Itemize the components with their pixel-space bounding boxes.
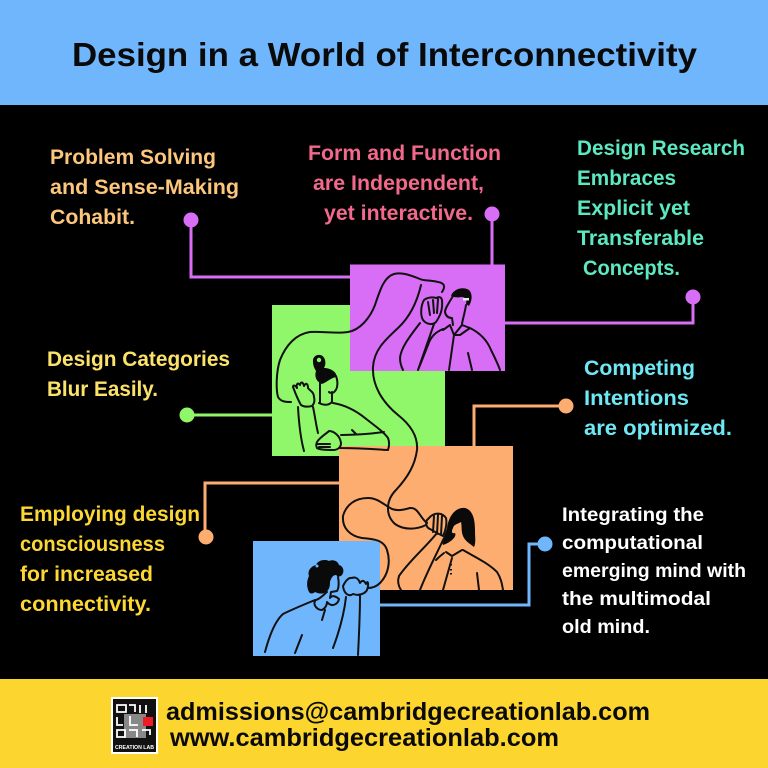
text block: form and function: are Independent, [313, 172, 484, 195]
text block: integrating minds: computational [562, 532, 703, 554]
icon: orange figure hair [442, 508, 475, 547]
panel: blue [253, 541, 380, 656]
connector: design categories to green panel [180, 408, 272, 422]
illustration: blue figure [265, 560, 368, 655]
string cords between figures [277, 273, 444, 588]
connector: design consciousness to orange panel [198, 483, 339, 544]
panel: green [272, 305, 445, 456]
icon: blue figure hair [307, 560, 343, 594]
text block: design research [577, 137, 745, 280]
text block: competing intentions [584, 357, 732, 440]
text block: competing intentions: Competing [584, 357, 695, 380]
text block: design consciousness: for increased [20, 563, 153, 586]
text block: design consciousness: consciousness [20, 533, 165, 556]
panel: orange [339, 446, 513, 590]
header band [0, 0, 768, 105]
text block: problem solving [50, 146, 239, 229]
connector: design research to purple panel [505, 290, 700, 323]
text block: integrating minds: Integrating the [562, 504, 704, 526]
text block: integrating minds: old mind. [562, 616, 650, 638]
icon: creation lab logo: CREATION LAB [115, 745, 154, 751]
text block: design research: Design Research [577, 137, 745, 160]
illustration: orange figure [398, 508, 503, 590]
connector: competing intentions to orange panel [474, 398, 574, 446]
text block: design research: Explicit yet [577, 197, 690, 220]
contact website: www.cambridgecreationlab.com [169, 724, 559, 752]
text block: competing intentions: Intentions [584, 387, 689, 410]
text block: design consciousness: Employing design [20, 503, 200, 526]
text block: competing intentions: are optimized. [584, 417, 732, 440]
panel: purple [350, 264, 505, 371]
icon: purple figure hair [451, 288, 472, 306]
illustration: green figure [293, 355, 389, 451]
text block: form and function [308, 142, 501, 225]
text block: design categories: Blur Easily. [47, 378, 158, 401]
text block: design categories [47, 348, 230, 401]
connector: form and function to purple panel [484, 206, 500, 265]
icon: orange figure buttons [450, 564, 452, 574]
icon: green figure hair [313, 355, 336, 384]
text block: form and function: yet interactive. [324, 202, 473, 225]
connector: integrating minds to blue panel [380, 536, 552, 605]
title: Design in a World of Interconnectivity [72, 36, 698, 73]
text block: design consciousness [20, 503, 200, 616]
text block: integrating minds: the multimodal [562, 588, 711, 610]
text block: design consciousness: connectivity. [20, 593, 151, 616]
text block: design research: Transferable [577, 227, 704, 250]
text block: problem solving: Problem Solving [50, 146, 216, 169]
icon: creation lab logo [111, 697, 158, 754]
connector: problem solving to purple panel [184, 212, 350, 277]
text block: form and function: Form and Function [308, 142, 501, 165]
illustration: purple figure [400, 288, 500, 370]
text block: problem solving: Cohabit. [50, 206, 135, 229]
text block: integrating minds: emerging mind with [562, 560, 746, 582]
text block: design research: Concepts. [583, 257, 680, 280]
footer band [0, 679, 768, 768]
text block: design research: Embraces [577, 167, 676, 190]
text block: problem solving: and Sense-Making [50, 176, 239, 199]
text block: design categories: Design Categories [47, 348, 230, 371]
contact email: admissions@cambridgecreationlab.com [166, 698, 650, 726]
text block: integrating minds [562, 504, 746, 638]
